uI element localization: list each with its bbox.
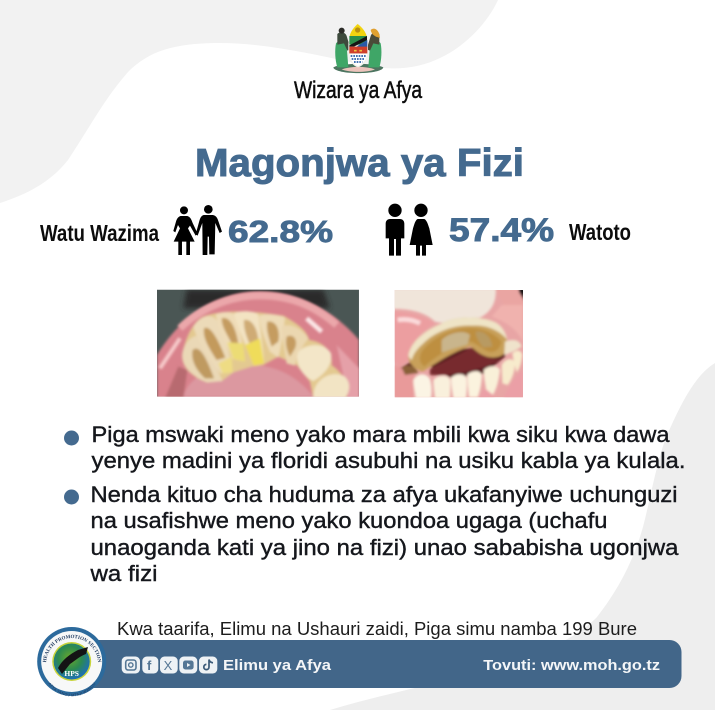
logo ring text top: HEALTH PROMOTION SECTION [42,634,102,662]
photo: tartar on child teeth [392,288,525,398]
logo ring text bottom: AFYA YANGU MTAJI WANGU [48,682,96,696]
icon: children [386,204,433,256]
footer label: Elimu ya Afya [223,657,332,674]
arms base ribbon [333,64,383,73]
icon: facebook: f [147,658,152,673]
bullet 1 line 2: yenye madini ya floridi asubuhi na usiku kabla ya kulala. [92,448,686,473]
footer bar [80,640,682,688]
icon: x: X [164,658,173,673]
icon: youtube [179,656,197,674]
coat of arms [333,23,383,73]
bullet marker 2 [64,490,79,504]
contact line: Kwa taarifa, Elimu na Ushauri zaidi, Piga simu namba 199 Bure [117,619,637,639]
bullet 1 line 1: Piga mswaki meno yako mara mbili kwa siku kwa dawa [92,422,670,447]
bullet 2 line 3: unaoganda kati ya jino na fizi) unao sababisha ugonjwa [90,535,679,560]
calculus crown [408,324,508,372]
bullet 2 line 1: Nenda kituo cha huduma za afya ukafanyiwe uchunguzi [90,482,678,507]
photo: tartar on adult teeth [157,290,359,398]
bullet marker 1 [64,430,79,446]
bullet 2 line 2: na usafishwe meno yako kuondoa ugaga (uchafu [90,508,608,533]
shield [348,23,368,67]
website: Tovuti: www.moh.go.tz [483,657,660,674]
bullet list [64,422,686,586]
stat: children: 57.4% [449,212,554,248]
ministry name: Wizara ya Afya [294,77,423,104]
right figure [368,41,381,67]
left figure [335,41,348,67]
background shape: bottom right [330,363,715,710]
label: children: Watoto [569,219,631,245]
label: adults: Watu Wazima [40,220,159,246]
icon: tiktok [199,656,217,674]
tooth backing [182,311,347,398]
icon: adults couple [173,205,222,255]
background shape: top left [0,0,498,203]
social icons [122,656,217,674]
logo initials: HPS [64,669,79,678]
stat: adults: 62.8% [228,214,333,249]
lower teeth [413,374,432,398]
bullet 2 line 4: wa fizi [89,561,158,586]
logo: health promotion section [37,627,106,696]
logo hands [58,647,88,674]
title: Magonjwa ya Fizi [195,142,524,185]
icon: instagram [122,656,140,674]
